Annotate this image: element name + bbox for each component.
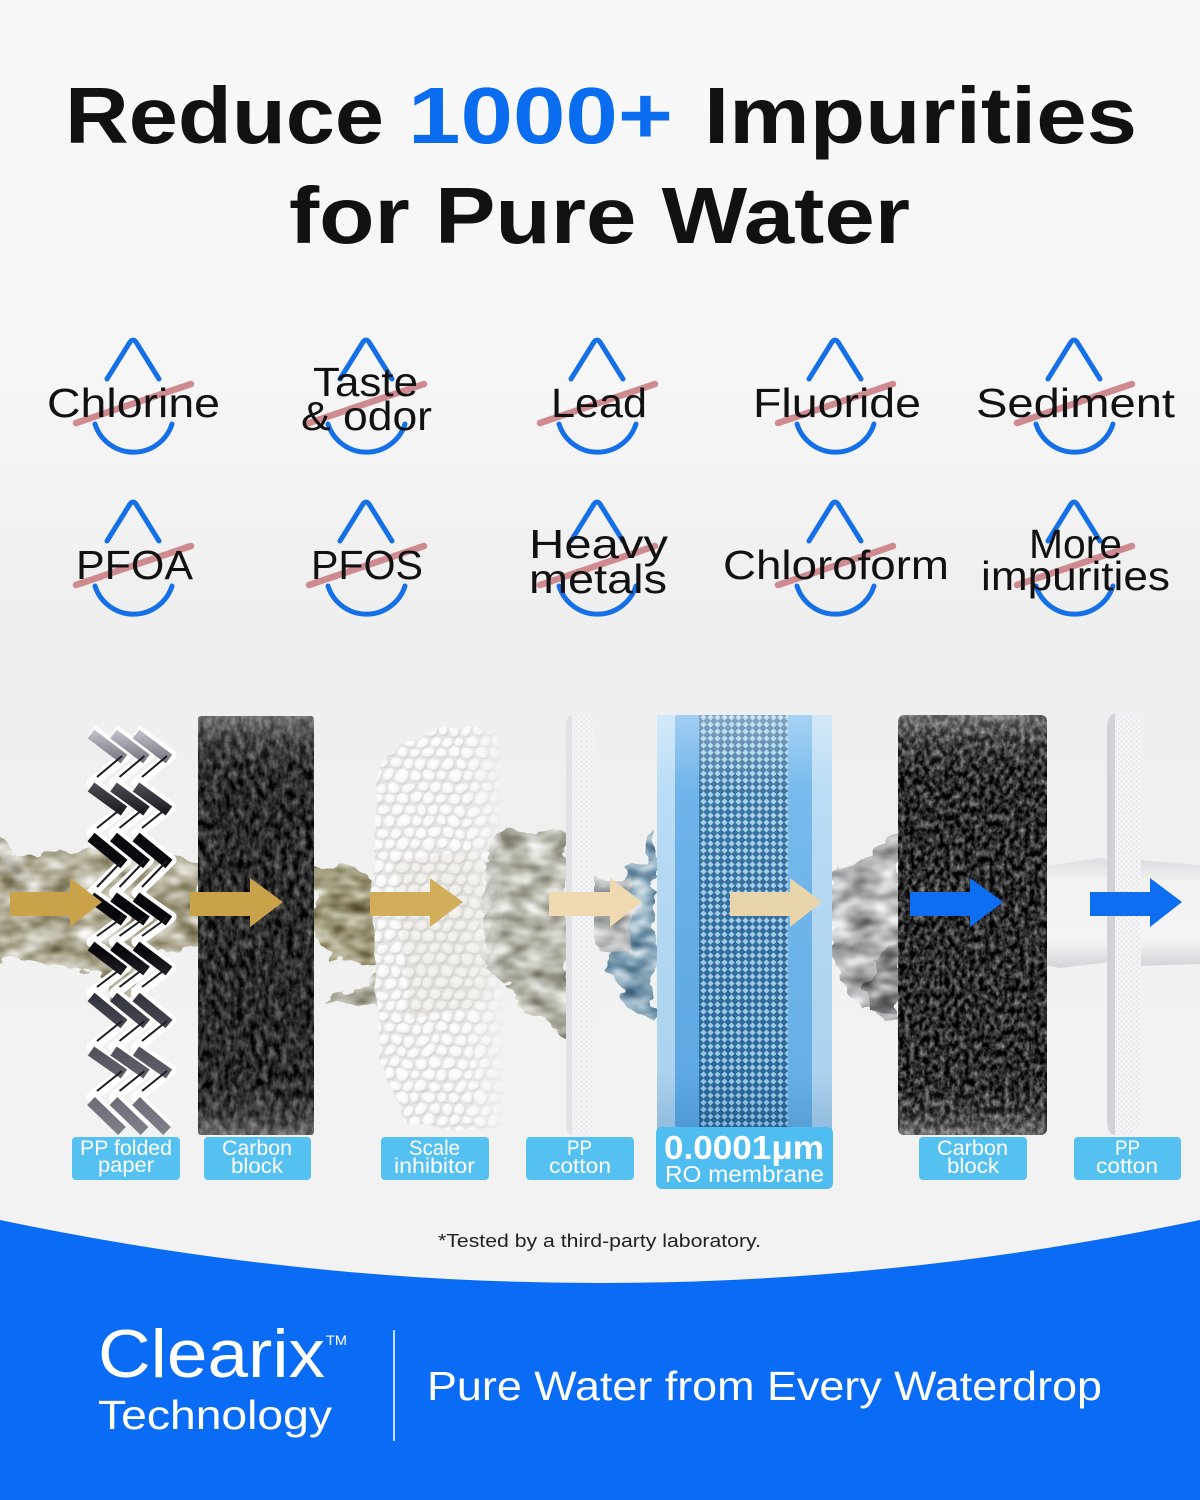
icon: Sediment: Sediment	[976, 380, 1176, 426]
icon: Fluoride: Fluoride	[753, 380, 921, 426]
water stream: after scale inhibitor	[480, 830, 568, 1040]
title	[65, 71, 1137, 260]
title: 1000+	[408, 71, 673, 160]
brand: Clearix Technology	[98, 1316, 347, 1438]
label: PP cotton 2: PP	[1115, 1137, 1140, 1160]
water stream: silver splash	[832, 826, 900, 1020]
filter: PP cotton 2	[1107, 714, 1141, 1135]
label: Carbon block: Carbon	[222, 1137, 292, 1160]
filter: carbon block 2	[898, 715, 1047, 1135]
arrow: stage 4	[549, 878, 642, 927]
label: Scale inhibitor: Scale	[409, 1137, 460, 1160]
icon: Taste and odor: Taste	[313, 359, 418, 405]
icon: Taste and odor: & odor	[301, 393, 432, 439]
label: Carbon block	[204, 1137, 311, 1180]
filter: PP cotton 1	[566, 715, 594, 1135]
icon: More impurities	[981, 502, 1170, 614]
label: RO membrane	[656, 1127, 833, 1189]
icon: PFOS	[309, 502, 424, 614]
label: RO membrane: RO membrane	[665, 1161, 824, 1187]
label: Carbon block 2	[919, 1137, 1027, 1180]
icon: PFOA: PFOA	[76, 542, 194, 588]
water stream: raw gold	[0, 820, 200, 1020]
water stream: after carbon	[312, 868, 400, 1015]
brand: Clearix Technology: TM	[326, 1332, 347, 1348]
icon: Lead	[540, 340, 655, 452]
label: Scale inhibitor: inhibitor	[394, 1155, 475, 1178]
water stream: clear	[1046, 858, 1200, 968]
icon: Taste and odor	[301, 340, 432, 452]
label: PP cotton: PP	[567, 1137, 592, 1160]
filter: PP folded paper	[91, 730, 171, 1131]
arrow: stage 7	[1090, 878, 1182, 927]
label: PP folded paper: paper	[98, 1154, 154, 1177]
icon: Heavy metals	[529, 502, 669, 614]
label: PP cotton: cotton	[549, 1155, 611, 1178]
filter: scale inhibitor beads	[372, 725, 505, 1132]
label: PP folded paper: PP folded	[80, 1137, 172, 1160]
label: PP cotton	[526, 1137, 634, 1180]
title: Impurities	[704, 71, 1137, 160]
tagline: Pure Water from Every Waterdrop	[427, 1363, 1102, 1409]
icon: Sediment	[976, 340, 1176, 452]
title: for Pure Water	[289, 171, 910, 260]
brand: Clearix Technology: Clearix	[98, 1316, 325, 1392]
filter: carbon block 1	[198, 716, 314, 1135]
icon: More impurities: More	[1029, 521, 1122, 567]
icon: Heavy metals: Heavy	[529, 521, 669, 567]
brand: Clearix Technology: Technology	[98, 1392, 333, 1438]
icon: Heavy metals: metals	[529, 556, 667, 602]
title: Reduce	[65, 71, 384, 160]
blue footer band	[0, 1220, 1200, 1500]
label: PP cotton 2	[1074, 1137, 1181, 1180]
filter: RO membrane	[657, 715, 832, 1133]
icon: Chlorine	[47, 340, 220, 452]
icon: Chlorine: Chlorine	[47, 380, 220, 426]
arrow: stage 5	[730, 878, 822, 927]
footnote: *Tested by a third-party laboratory.	[438, 1231, 761, 1251]
arrow: stage 6	[910, 878, 1003, 927]
icon: PFOA	[76, 502, 194, 614]
arrow: stage 1	[10, 878, 102, 927]
icon: Chloroform: Chloroform	[723, 542, 949, 588]
water stream: blue splash	[592, 826, 655, 1025]
icon: Chloroform	[723, 502, 949, 614]
arrow: stage 3	[370, 878, 463, 927]
icon: PFOS: PFOS	[311, 542, 423, 588]
icon: Fluoride	[753, 340, 921, 452]
label: Carbon block: block	[231, 1155, 284, 1178]
filtration stages diagram	[0, 714, 1200, 1189]
label: Carbon block 2: block	[947, 1155, 1000, 1178]
label: PP folded paper	[72, 1137, 180, 1180]
icon: Lead: Lead	[551, 380, 647, 426]
label: RO membrane: 0.0001μm	[664, 1129, 824, 1166]
arrow: stage 2	[190, 878, 283, 927]
label: Scale inhibitor	[381, 1137, 489, 1180]
label: PP cotton 2: cotton	[1096, 1155, 1158, 1178]
label: Carbon block 2: Carbon	[937, 1137, 1008, 1160]
icon: More impurities: impurities	[981, 553, 1170, 599]
impurities icon grid	[47, 340, 1176, 614]
